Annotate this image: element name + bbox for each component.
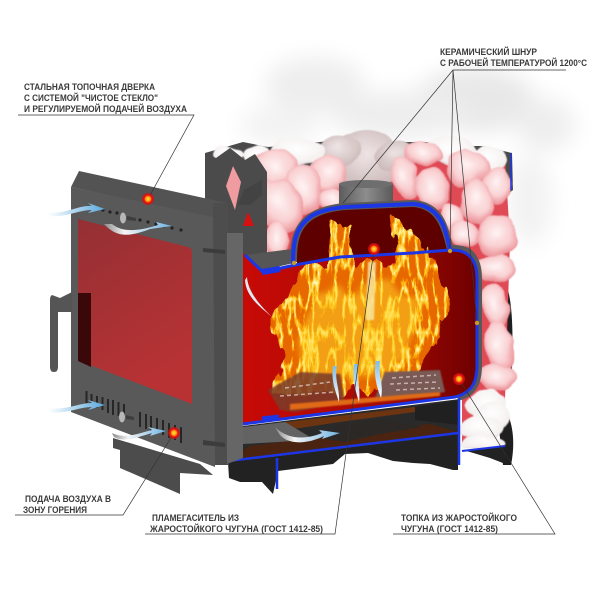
- ash pit: [228, 399, 460, 461]
- seal points: [292, 249, 479, 325]
- arrow: upper intake: [48, 203, 105, 216]
- label: ceramic cord: С РАБОЧЕЙ ТЕМПЕРАТУРОЙ 1200°С: [440, 57, 587, 68]
- handle: [50, 292, 72, 372]
- flames: [270, 218, 452, 394]
- vent holes upper: [101, 208, 183, 232]
- glass reflection slit: [78, 293, 91, 367]
- stones: [212, 130, 518, 450]
- top casing band: [205, 141, 513, 200]
- ash box under door: [113, 438, 213, 494]
- vent slots lower: [86, 391, 181, 443]
- arrows: burning air streams: [332, 366, 339, 402]
- door glass: [78, 219, 192, 404]
- firebox grey shell: [290, 200, 482, 401]
- marker dots: [142, 193, 465, 439]
- label: firebox: ЧУГУНА (ГОСТ 1412-85): [401, 524, 498, 534]
- label: firebox: ТОПКА ИЗ ЖАРОСТОЙКОГО: [401, 512, 517, 523]
- logs: [268, 370, 445, 412]
- label: door: С СИСТЕМОЙ "ЧИСТОЕ СТЕКЛО": [24, 92, 158, 103]
- arrow: ash pit: [275, 427, 340, 442]
- label: flame arrester: ЖАРОСТОЙКОГО ЧУГУНА (ГОСТ 1412-85): [149, 523, 323, 534]
- door side columns: [213, 203, 228, 465]
- label: door: [24, 82, 187, 114]
- label: ceramic cord: [440, 46, 587, 68]
- door flange: [71, 171, 227, 222]
- door: [50, 171, 243, 494]
- label: flame arrester: [149, 513, 323, 534]
- label: flame arrester: ПЛАМЕГАСИТЕЛЬ ИЗ: [152, 513, 239, 523]
- label: door: И РЕГУЛИРУЕМОЙ ПОДАЧЕЙ ВОЗДУХА: [24, 103, 187, 114]
- firebox chamber: [243, 207, 477, 424]
- left casing with cutouts: [205, 148, 267, 258]
- arrow: glass airwash: [104, 222, 172, 235]
- leader lines: [15, 70, 566, 534]
- feet and lower shelf: [228, 153, 511, 494]
- ash pile: [320, 419, 422, 442]
- red glow behind stones: [262, 158, 510, 445]
- blue firebox outline: [243, 204, 477, 424]
- airflow arrows: [48, 203, 382, 442]
- arrow: combustion intake: [112, 427, 166, 440]
- label: air supply: ПОДАЧА ВОЗДУХА В: [25, 494, 111, 504]
- label: air supply: ЗОНУ ГОРЕНИЯ: [23, 505, 87, 515]
- partition wedge: [245, 249, 294, 270]
- label: air supply: [23, 494, 111, 515]
- label: door: СТАЛЬНАЯ ТОПОЧНАЯ ДВЕРКА: [24, 82, 155, 92]
- stove body with stones: [205, 130, 518, 465]
- arrow: lower intake: [48, 400, 105, 413]
- upper damper knob: [120, 212, 136, 224]
- door front plate: [71, 187, 215, 467]
- lower damper knob: [119, 412, 134, 422]
- label: firebox: [401, 512, 517, 534]
- arrow: inside chamber: [245, 277, 272, 317]
- label: ceramic cord: КЕРАМИЧЕСКИЙ ШНУР: [440, 46, 537, 57]
- hinges: [203, 248, 225, 447]
- ceramic flue collar: [339, 180, 393, 210]
- smoke cloud: [240, 57, 575, 245]
- right dark casing edge: [498, 283, 513, 465]
